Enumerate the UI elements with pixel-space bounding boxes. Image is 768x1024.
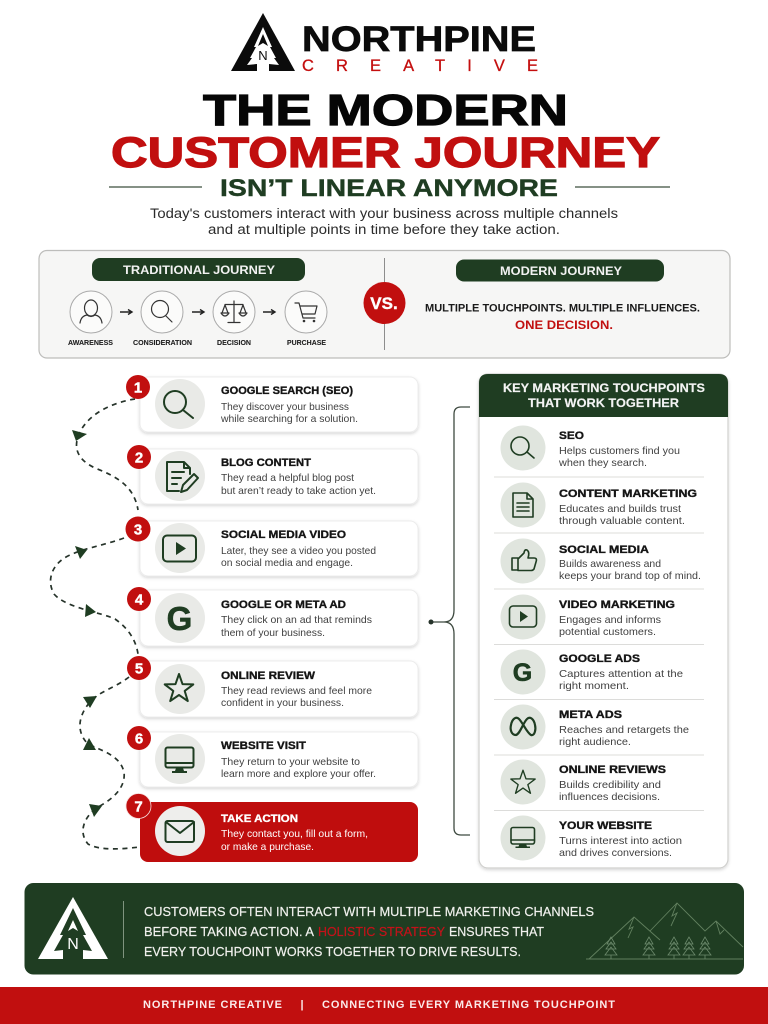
banner text	[144, 904, 594, 959]
footer bar: CONNECTING EVERY MARKETING TOUCHPOINT	[322, 999, 615, 1011]
touchpoint: social media: SOCIAL MEDIA	[559, 544, 649, 556]
modern journey text: MULTIPLE TOUCHPOINTS. MULTIPLE INFLUENCES.	[425, 302, 700, 314]
badge 2	[127, 445, 151, 469]
step 1: google search	[126, 375, 418, 432]
modern journey heading: MODERN JOURNEY	[500, 266, 622, 278]
badge 4	[127, 587, 151, 611]
badge 7	[126, 794, 151, 818]
touchpoint: google ads: G	[513, 659, 532, 687]
touchpoint: social media: Builds awareness and	[559, 559, 661, 570]
icon: g mark	[155, 593, 205, 643]
step 2 text	[221, 457, 376, 497]
footer bar: |	[300, 999, 304, 1011]
panel: key marketing touchpoints	[479, 374, 728, 868]
touchpoint: social media: keeps your brand top of mind.	[559, 571, 701, 582]
touchpoint: meta ads	[500, 704, 689, 750]
icon: star	[155, 664, 205, 714]
touchpoint: seo	[500, 426, 680, 470]
stage labels	[68, 340, 326, 347]
touchpoint: online reviews: ONLINE REVIEWS	[559, 764, 666, 776]
touchpoint: content marketing: CONTENT MARKETING	[559, 488, 697, 500]
step 2 text: They read a helpful blog post	[221, 473, 354, 484]
touchpoint: google ads: Captures attention at the	[559, 669, 683, 680]
touchpoint: google ads	[500, 650, 683, 694]
step 6 text: They return to your website to	[221, 757, 360, 768]
stage labels: DECISION	[217, 340, 251, 347]
badge 3: 3	[134, 522, 142, 538]
touchpoint: online reviews	[500, 760, 666, 804]
touchpoint: seo: SEO	[559, 430, 584, 442]
arrow	[192, 310, 204, 314]
modern journey text	[425, 302, 700, 332]
touchpoint: google ads: right moment.	[559, 681, 629, 692]
panel header	[479, 374, 728, 417]
step 1 text: GOOGLE SEARCH (SEO)	[221, 385, 353, 397]
touchpoint: content marketing: through valuable content.	[559, 516, 685, 527]
step 4: google or meta ad	[127, 587, 418, 646]
logo subline: CREATIVE	[302, 57, 538, 75]
title	[109, 86, 670, 202]
arrow	[120, 310, 132, 314]
badge 1	[126, 375, 150, 399]
touchpoint: content marketing: Educates and builds trust	[559, 504, 681, 515]
traditional journey heading: TRADITIONAL JOURNEY	[123, 265, 275, 277]
badge 6: 6	[135, 730, 143, 748]
banner text: BEFORE TAKING ACTION. A	[144, 924, 314, 939]
step 6 text: WEBSITE VISIT	[221, 740, 306, 752]
callout banner	[24, 883, 744, 974]
step 7: take action	[126, 794, 418, 862]
step 1 text: They discover your business	[221, 402, 349, 413]
step 2: blog content	[127, 445, 418, 504]
step 1 text: while searching for a solution.	[220, 414, 358, 425]
icon: document and pencil	[155, 451, 205, 501]
intro text: and at multiple points in time before they take action.	[208, 222, 560, 237]
banner logo	[38, 897, 108, 959]
banner text: CUSTOMERS OFTEN INTERACT WITH MULTIPLE MARKETING CHANNELS	[144, 904, 594, 919]
icon: envelope	[155, 806, 205, 856]
touchpoint: your website	[500, 816, 682, 860]
modern journey text: ONE DECISION.	[515, 318, 613, 332]
step 5: online review	[127, 656, 418, 717]
touchpoint: meta ads: Reaches and retargets the	[559, 725, 689, 736]
icon: awareness	[70, 291, 112, 333]
versus badge: VS.	[370, 294, 398, 313]
icon: purchase	[285, 291, 327, 333]
badge 6	[127, 726, 151, 750]
step 6 text: learn more and explore your offer.	[221, 769, 376, 780]
step 5 text: They read reviews and feel more	[221, 686, 372, 697]
step 2 text: but aren’t ready to take action yet.	[221, 486, 376, 497]
touchpoint: content marketing	[500, 482, 697, 528]
banner logo: N	[67, 936, 79, 953]
step 4 text: them of your business.	[221, 628, 325, 639]
step 3 text: Later, they see a video you posted	[221, 546, 376, 557]
panel header: THAT WORK TOGETHER	[528, 398, 680, 410]
step 5 text: ONLINE REVIEW	[221, 670, 316, 682]
stage labels: AWARENESS	[68, 340, 113, 347]
title line 1: THE MODERN	[203, 86, 568, 135]
footer bar	[0, 987, 768, 1024]
touchpoint: video marketing: VIDEO MARKETING	[559, 599, 675, 611]
touchpoint: your website: Turns interest into action	[559, 836, 682, 847]
icon: search	[155, 379, 205, 429]
title line 2: CUSTOMER JOURNEY	[111, 129, 660, 177]
icon: video	[155, 523, 205, 573]
panel: traditional vs modern	[39, 250, 730, 358]
logo	[231, 13, 538, 75]
arrowheads	[72, 430, 102, 817]
badge 4: 4	[135, 592, 144, 608]
step 6: website visit	[127, 726, 418, 787]
bracket connector	[428, 407, 470, 835]
banner text: HOLISTIC STRATEGY	[318, 924, 445, 939]
icon: decision	[213, 291, 255, 333]
traditional journey heading	[92, 258, 305, 281]
step 3: social media video	[126, 516, 418, 576]
step 4 text	[221, 599, 372, 639]
badge 1: 1	[134, 380, 142, 396]
step 7 text: or make a purchase.	[221, 842, 314, 853]
touchpoint: online reviews: influences decisions.	[559, 792, 660, 803]
badge 5	[127, 656, 151, 680]
icon: monitor	[155, 734, 205, 784]
step 4 text: They click on an ad that reminds	[221, 615, 372, 626]
logo wordmark: NORTHPINE	[302, 20, 536, 59]
step 1 text	[220, 385, 358, 425]
badge 7: 7	[134, 798, 143, 816]
step 7 text	[221, 813, 368, 853]
banner mountains illustration	[586, 903, 743, 959]
panel header: KEY MARKETING TOUCHPOINTS	[503, 383, 705, 395]
step 4 text: GOOGLE OR META AD	[221, 599, 346, 611]
modern journey heading	[456, 260, 664, 282]
title line 3: ISN’T LINEAR ANYMORE	[220, 175, 558, 202]
footer bar: NORTHPINE CREATIVE	[143, 999, 282, 1011]
logo mark: N	[258, 48, 268, 63]
touchpoint: seo: Helps customers find you	[559, 446, 680, 457]
stage labels: CONSIDERATION	[133, 340, 192, 347]
badge 3	[126, 516, 150, 542]
step 5 text: confident in your business.	[221, 698, 344, 709]
step 3 text: on social media and engage.	[221, 558, 353, 569]
touchpoint: your website: and drives conversions.	[559, 848, 672, 859]
versus badge	[364, 282, 406, 324]
touchpoint: meta ads: right audience.	[559, 737, 631, 748]
touchpoint: video marketing: Engages and informs	[559, 615, 661, 626]
step 6 text	[221, 740, 376, 780]
step 7 text: TAKE ACTION	[221, 813, 298, 825]
journey path	[51, 399, 140, 849]
touchpoint: video marketing: potential customers.	[559, 627, 656, 638]
icon: consideration	[141, 291, 183, 333]
step 7 text: They contact you, fill out a form,	[221, 829, 368, 840]
arrow	[263, 310, 275, 314]
step 2 text: BLOG CONTENT	[221, 457, 311, 469]
touchpoint: seo: when they search.	[558, 458, 647, 469]
touchpoint: online reviews: Builds credibility and	[559, 780, 661, 791]
badge 2: 2	[135, 450, 143, 466]
intro text: Today's customers interact with your business across multiple channels	[150, 206, 618, 221]
badge 5: 5	[135, 660, 143, 678]
touchpoint: your website: YOUR WEBSITE	[559, 820, 652, 832]
step 3 text: SOCIAL MEDIA VIDEO	[221, 529, 346, 541]
touchpoint: social media	[500, 538, 701, 584]
stage labels: PURCHASE	[287, 340, 326, 347]
banner text: EVERY TOUCHPOINT WORKS TOGETHER TO DRIVE RESULTS.	[144, 944, 521, 959]
step 3 text	[221, 529, 376, 569]
touchpoint: meta ads: META ADS	[559, 709, 622, 721]
touchpoint: google ads: GOOGLE ADS	[559, 653, 640, 665]
logo mark	[231, 13, 295, 71]
banner text: ENSURES THAT	[449, 924, 544, 939]
intro text	[150, 206, 618, 237]
step 5 text	[221, 670, 372, 709]
touchpoint: video marketing	[500, 594, 675, 640]
icon: g mark: G	[167, 600, 192, 637]
